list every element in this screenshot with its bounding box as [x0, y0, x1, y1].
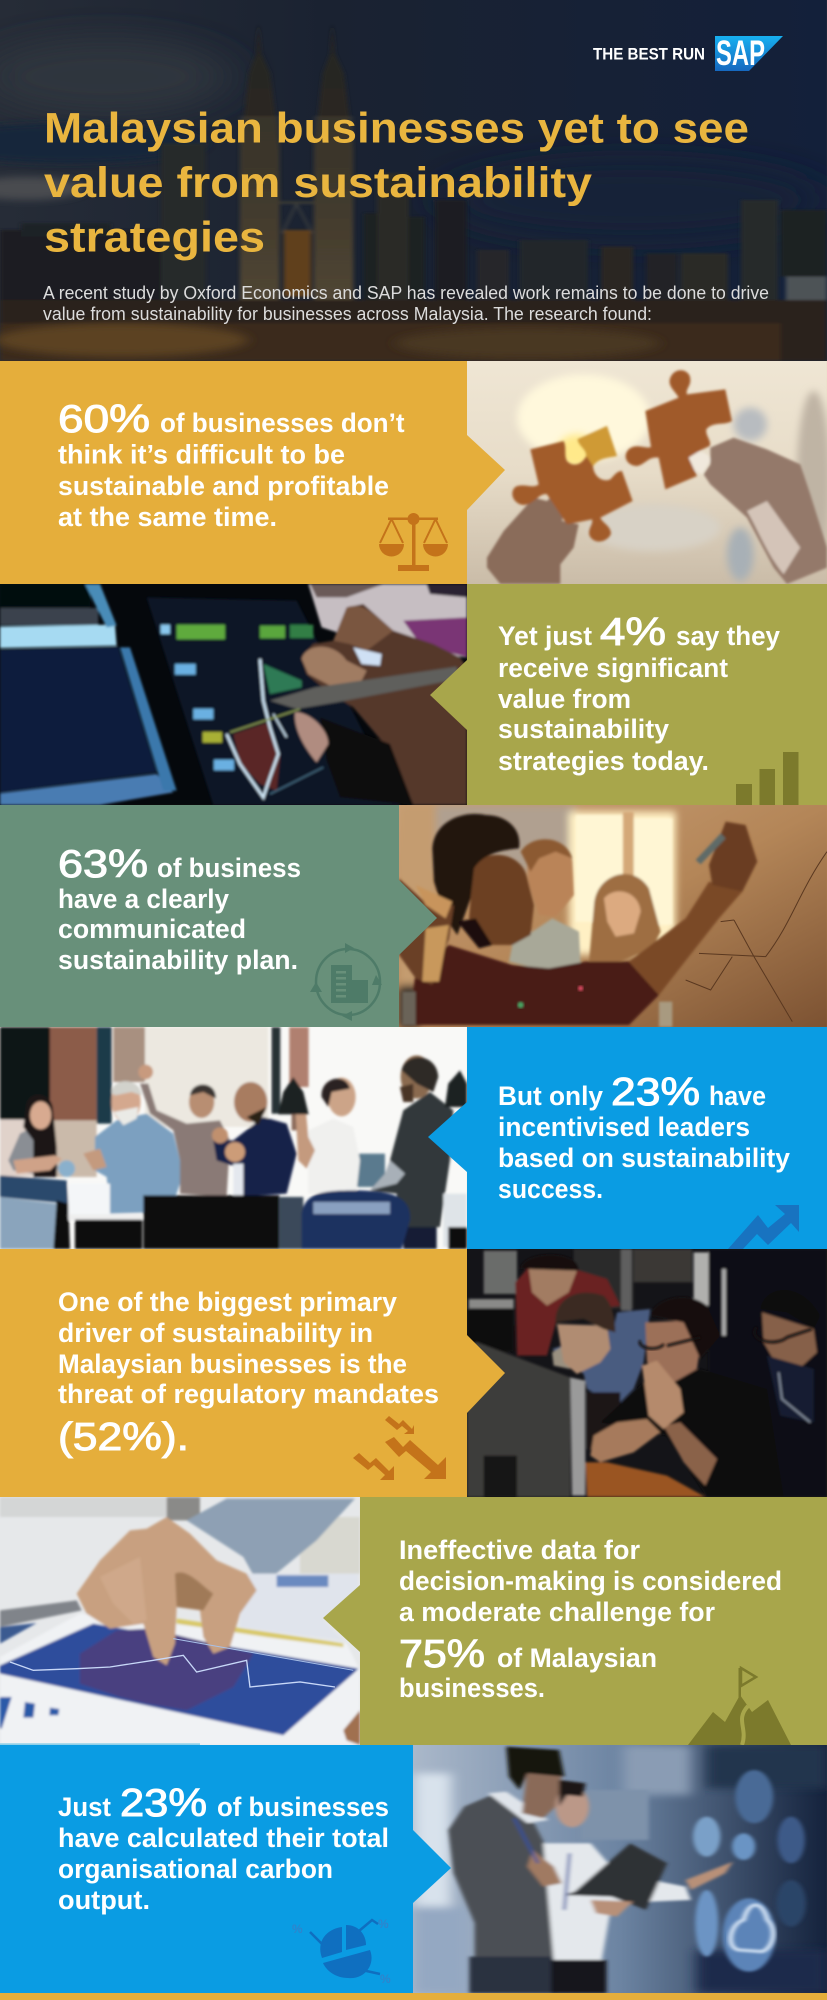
stat text: 4%: sustainability	[498, 714, 669, 744]
stat text: 52%: Malaysian businesses is the	[58, 1349, 407, 1379]
title	[44, 104, 749, 262]
panel 6: olive statistic card	[323, 1497, 827, 1745]
stat text: 23%: based on sustainability	[498, 1143, 790, 1173]
icon: falling zigzag arrows	[353, 1416, 446, 1480]
stat text: 4%: strategies today.	[498, 746, 709, 776]
stat text: 60%: of businesses don’t	[160, 408, 404, 438]
stat text: 63%: 63%	[58, 843, 148, 886]
stat text: 23%: have calculated their total	[58, 1823, 389, 1853]
stat text: 4%	[498, 611, 780, 776]
panel 2: olive statistic card	[430, 584, 827, 805]
stat text: 63%: have a clearly	[58, 884, 229, 914]
panel 7: blue statistic card	[0, 1745, 451, 1993]
stat text: 75%	[399, 1535, 782, 1703]
stat text: 75%: a moderate challenge for	[399, 1597, 715, 1627]
stat text: 52%: threat of regulatory mandates	[58, 1379, 439, 1409]
stat text: 23%	[58, 1782, 389, 1915]
icon: balance scale	[379, 513, 448, 571]
icon: pie chart with percentages: %	[292, 1922, 303, 1936]
logo: The Best Run SAP: THE BEST RUN	[593, 44, 705, 64]
panel 3: green statistic card	[0, 805, 437, 1027]
stat text: 75%: Ineffective data for	[399, 1535, 640, 1565]
stat text: 23%: incentivised leaders	[498, 1112, 750, 1142]
stat text: 63%	[58, 843, 301, 975]
panel 7: photo of engineers in data centre	[413, 1745, 827, 1993]
stat text: 52%	[58, 1287, 439, 1459]
stat text: 52%: One of the biggest primary	[58, 1287, 397, 1317]
stat text: 4%: receive significant	[498, 653, 728, 683]
stat text: 23%: But only	[498, 1081, 603, 1111]
header: city skyline photo background	[0, 0, 827, 361]
stat text: 23%: have	[709, 1081, 766, 1111]
stat text: 52%: driver of sustainability in	[58, 1318, 373, 1348]
panel 1: photo of puzzle pieces and hands	[467, 361, 827, 584]
stat text: 23%: 23%	[611, 1071, 700, 1114]
icon: pie chart with percentages: %	[380, 1972, 391, 1986]
stat text: 4%: 4%	[600, 611, 666, 654]
stat text: 23%: 23%	[120, 1782, 207, 1825]
icon: mountain with flag	[688, 1668, 791, 1745]
stat text: 4%: value from	[498, 684, 631, 714]
panel 3: photo of team at whiteboard	[399, 805, 827, 1027]
title: strategies	[44, 214, 265, 262]
icon: pie chart with percentages: %	[378, 1917, 389, 1931]
stat text: 4%: Yet just	[498, 621, 592, 651]
icon: pie chart with percentages	[292, 1917, 391, 1986]
intro text	[43, 283, 769, 324]
panel 5: yellow statistic card	[0, 1249, 505, 1497]
intro text: A recent study by Oxford Economics and SAP has revealed work remains to be done to drive	[43, 283, 769, 303]
stat text: 75%: businesses.	[399, 1673, 545, 1703]
stat text: 23%	[498, 1071, 790, 1204]
title: Malaysian businesses yet to see	[44, 104, 749, 152]
stat text: 23%: output.	[58, 1885, 150, 1915]
stat text: 75%: decision-making is considered	[399, 1566, 782, 1596]
panel 1: yellow statistic card	[0, 361, 505, 584]
stat text: 52%: (52%).	[58, 1416, 189, 1459]
stat text: 60%: think it’s difficult to be	[58, 440, 345, 470]
stat text: 75%: of Malaysian	[497, 1643, 657, 1673]
panel 4: blue statistic card	[428, 1027, 827, 1249]
footer strip	[0, 1993, 827, 2000]
stat text: 75%: 75%	[399, 1633, 485, 1676]
title: value from sustainability	[44, 159, 592, 207]
stat text: 60%: sustainable and profitable	[58, 471, 389, 501]
icon: rising arrow	[728, 1205, 799, 1249]
stat text: 63%: sustainability plan.	[58, 945, 298, 975]
panel 2: photo of trading tablet	[0, 584, 467, 805]
stat text: 23%: of businesses	[217, 1792, 389, 1822]
stat text: 63%: communicated	[58, 914, 246, 944]
logo: The Best Run SAP	[593, 34, 783, 73]
icon: building in recycle loop	[310, 943, 382, 1021]
stat text: 4%: say they	[676, 621, 780, 651]
stat text: 60%: 60%	[58, 398, 150, 441]
stat text: 60%	[58, 398, 404, 532]
intro text: value from sustainability for businesses across Malaysia. The research found:	[43, 304, 652, 324]
panel 6: photo of finger on tablet chart	[0, 1497, 360, 1745]
panel 5: photo of worried colleagues at monitor	[467, 1249, 827, 1497]
stat text: 60%: at the same time.	[58, 502, 277, 532]
icon: bar chart	[736, 752, 798, 805]
stat text: 23%: organisational carbon	[58, 1854, 333, 1884]
logo: The Best Run SAP: SAP	[716, 34, 765, 73]
panel 4: photo of celebrating office team	[0, 1027, 467, 1249]
stat text: 23%: success.	[498, 1174, 603, 1204]
stat text: 23%: Just	[58, 1792, 111, 1822]
stat text: 63%: of business	[157, 853, 301, 883]
